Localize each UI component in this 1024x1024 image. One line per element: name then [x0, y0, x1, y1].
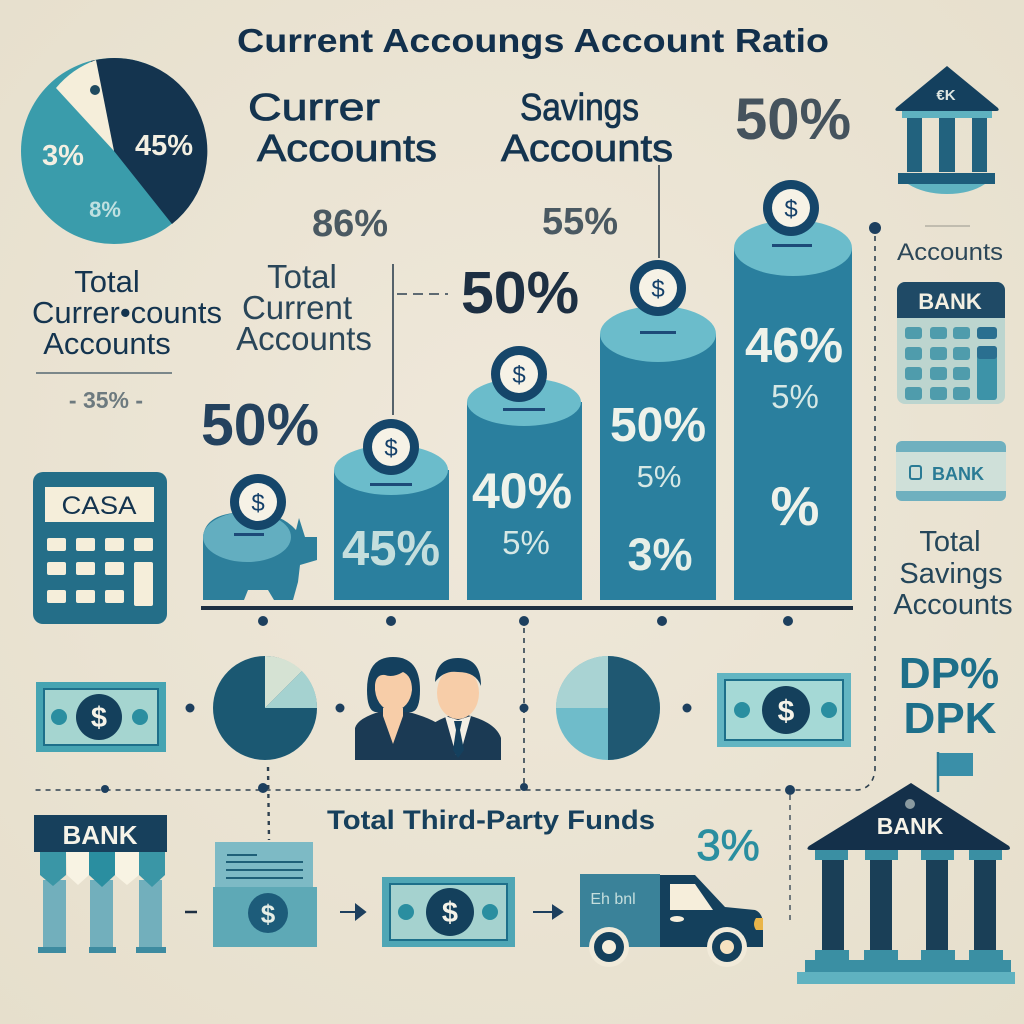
bar 4 — [734, 180, 852, 600]
icon: money left — [36, 682, 166, 752]
bar 2 — [467, 346, 582, 600]
icon: piggy bank: $ — [251, 490, 265, 517]
bar 3: 3% — [627, 529, 693, 580]
icon: document with dollar: $ — [261, 899, 276, 929]
icon: money left: $ — [91, 702, 107, 734]
icon: calculator CASA — [33, 472, 167, 624]
percent: 3% bottom: 3% — [696, 821, 760, 870]
icon: money right: $ — [778, 695, 795, 728]
bar 2: 40% — [472, 463, 572, 519]
small value row — [36, 373, 172, 413]
icon: delivery van — [580, 874, 763, 967]
heading: savings accounts: Accounts — [501, 128, 673, 170]
label: total current accounts left: Total — [74, 264, 140, 299]
bar 1: 45% — [342, 522, 440, 576]
label: total current accounts left: Currer•counts — [32, 295, 222, 330]
label: total current accounts middle: Accounts — [236, 320, 372, 357]
icon: bank top right — [895, 66, 999, 194]
icon: calculator CASA: CASA — [62, 492, 137, 520]
bar 3 — [600, 260, 716, 600]
label: total savings accounts: Accounts — [893, 589, 1013, 621]
percent: 50% left: 50% — [201, 392, 319, 458]
label: total current accounts left: Accounts — [43, 326, 171, 361]
pie: middle left — [213, 656, 317, 760]
heading: savings accounts: Savings — [520, 87, 639, 129]
icon: bank calculator right — [897, 282, 1005, 404]
percent: 50% top: 50% — [735, 87, 851, 152]
bar 4: 46% — [745, 319, 843, 373]
bar 2: $ — [512, 362, 526, 389]
icon: money right — [717, 673, 851, 747]
percent: 86%: 86% — [312, 203, 388, 245]
label: DP% DPK: DPK — [904, 694, 997, 743]
label: total current accounts middle: Current — [242, 289, 352, 326]
bar 1: $ — [384, 435, 398, 462]
icon: money bottom — [382, 877, 515, 947]
bar 3: $ — [651, 276, 665, 303]
bar 1 — [334, 419, 449, 600]
pie chart: top left: 45% — [135, 130, 193, 162]
bar 4: $ — [784, 196, 798, 223]
icon: bank storefront — [34, 815, 167, 953]
icon: delivery van: Eh bnl — [590, 891, 636, 908]
icon: two people — [355, 657, 501, 760]
bar 4: 5% — [771, 378, 819, 415]
arrow — [340, 905, 365, 919]
pie: middle right — [556, 656, 660, 760]
bar 3: 50% — [610, 399, 706, 452]
label: total savings accounts: Savings — [899, 558, 1003, 590]
bar 3: 5% — [637, 459, 681, 494]
label: total current accounts middle: Total — [267, 258, 337, 295]
label: DP% DPK: DP% — [899, 649, 999, 698]
connector lines — [33, 165, 970, 925]
percent: 55%: 55% — [542, 201, 618, 243]
percent: 50% center: 50% — [461, 260, 579, 326]
icon: large bank: BANK — [877, 813, 944, 839]
title: Current Accoungs Account Ratio — [237, 22, 829, 59]
icon: piggy bank — [203, 474, 317, 600]
small value row: - 35% - — [69, 387, 143, 413]
heading: current accounts: Accounts — [257, 128, 437, 170]
icon: bank top right: €K — [936, 87, 956, 104]
icon: document with dollar — [213, 842, 317, 947]
heading: current accounts: Currer — [248, 87, 380, 129]
arrow — [185, 911, 197, 913]
icon: bank card: BANK — [932, 464, 984, 484]
bar 2: 5% — [502, 524, 550, 561]
icon: large bank — [797, 783, 1015, 984]
label: total savings accounts: Total — [919, 526, 981, 558]
icon: money bottom: $ — [442, 897, 458, 929]
icon: bank calculator right: BANK — [918, 289, 982, 314]
icon: bank card — [896, 441, 1006, 501]
pie chart: top left: 8% — [89, 197, 121, 222]
icon: bank storefront: BANK — [62, 820, 138, 850]
pie chart: top left: 3% — [42, 140, 84, 172]
label: total third-party funds: Total Third-Party Funds — [327, 805, 655, 835]
icon: flag — [938, 752, 973, 792]
label: accounts right: Accounts — [897, 239, 1003, 266]
pie chart: top left — [21, 58, 207, 244]
bar 4: % — [771, 475, 819, 537]
arrow — [533, 906, 562, 918]
chart baseline and ticks — [101, 222, 881, 795]
